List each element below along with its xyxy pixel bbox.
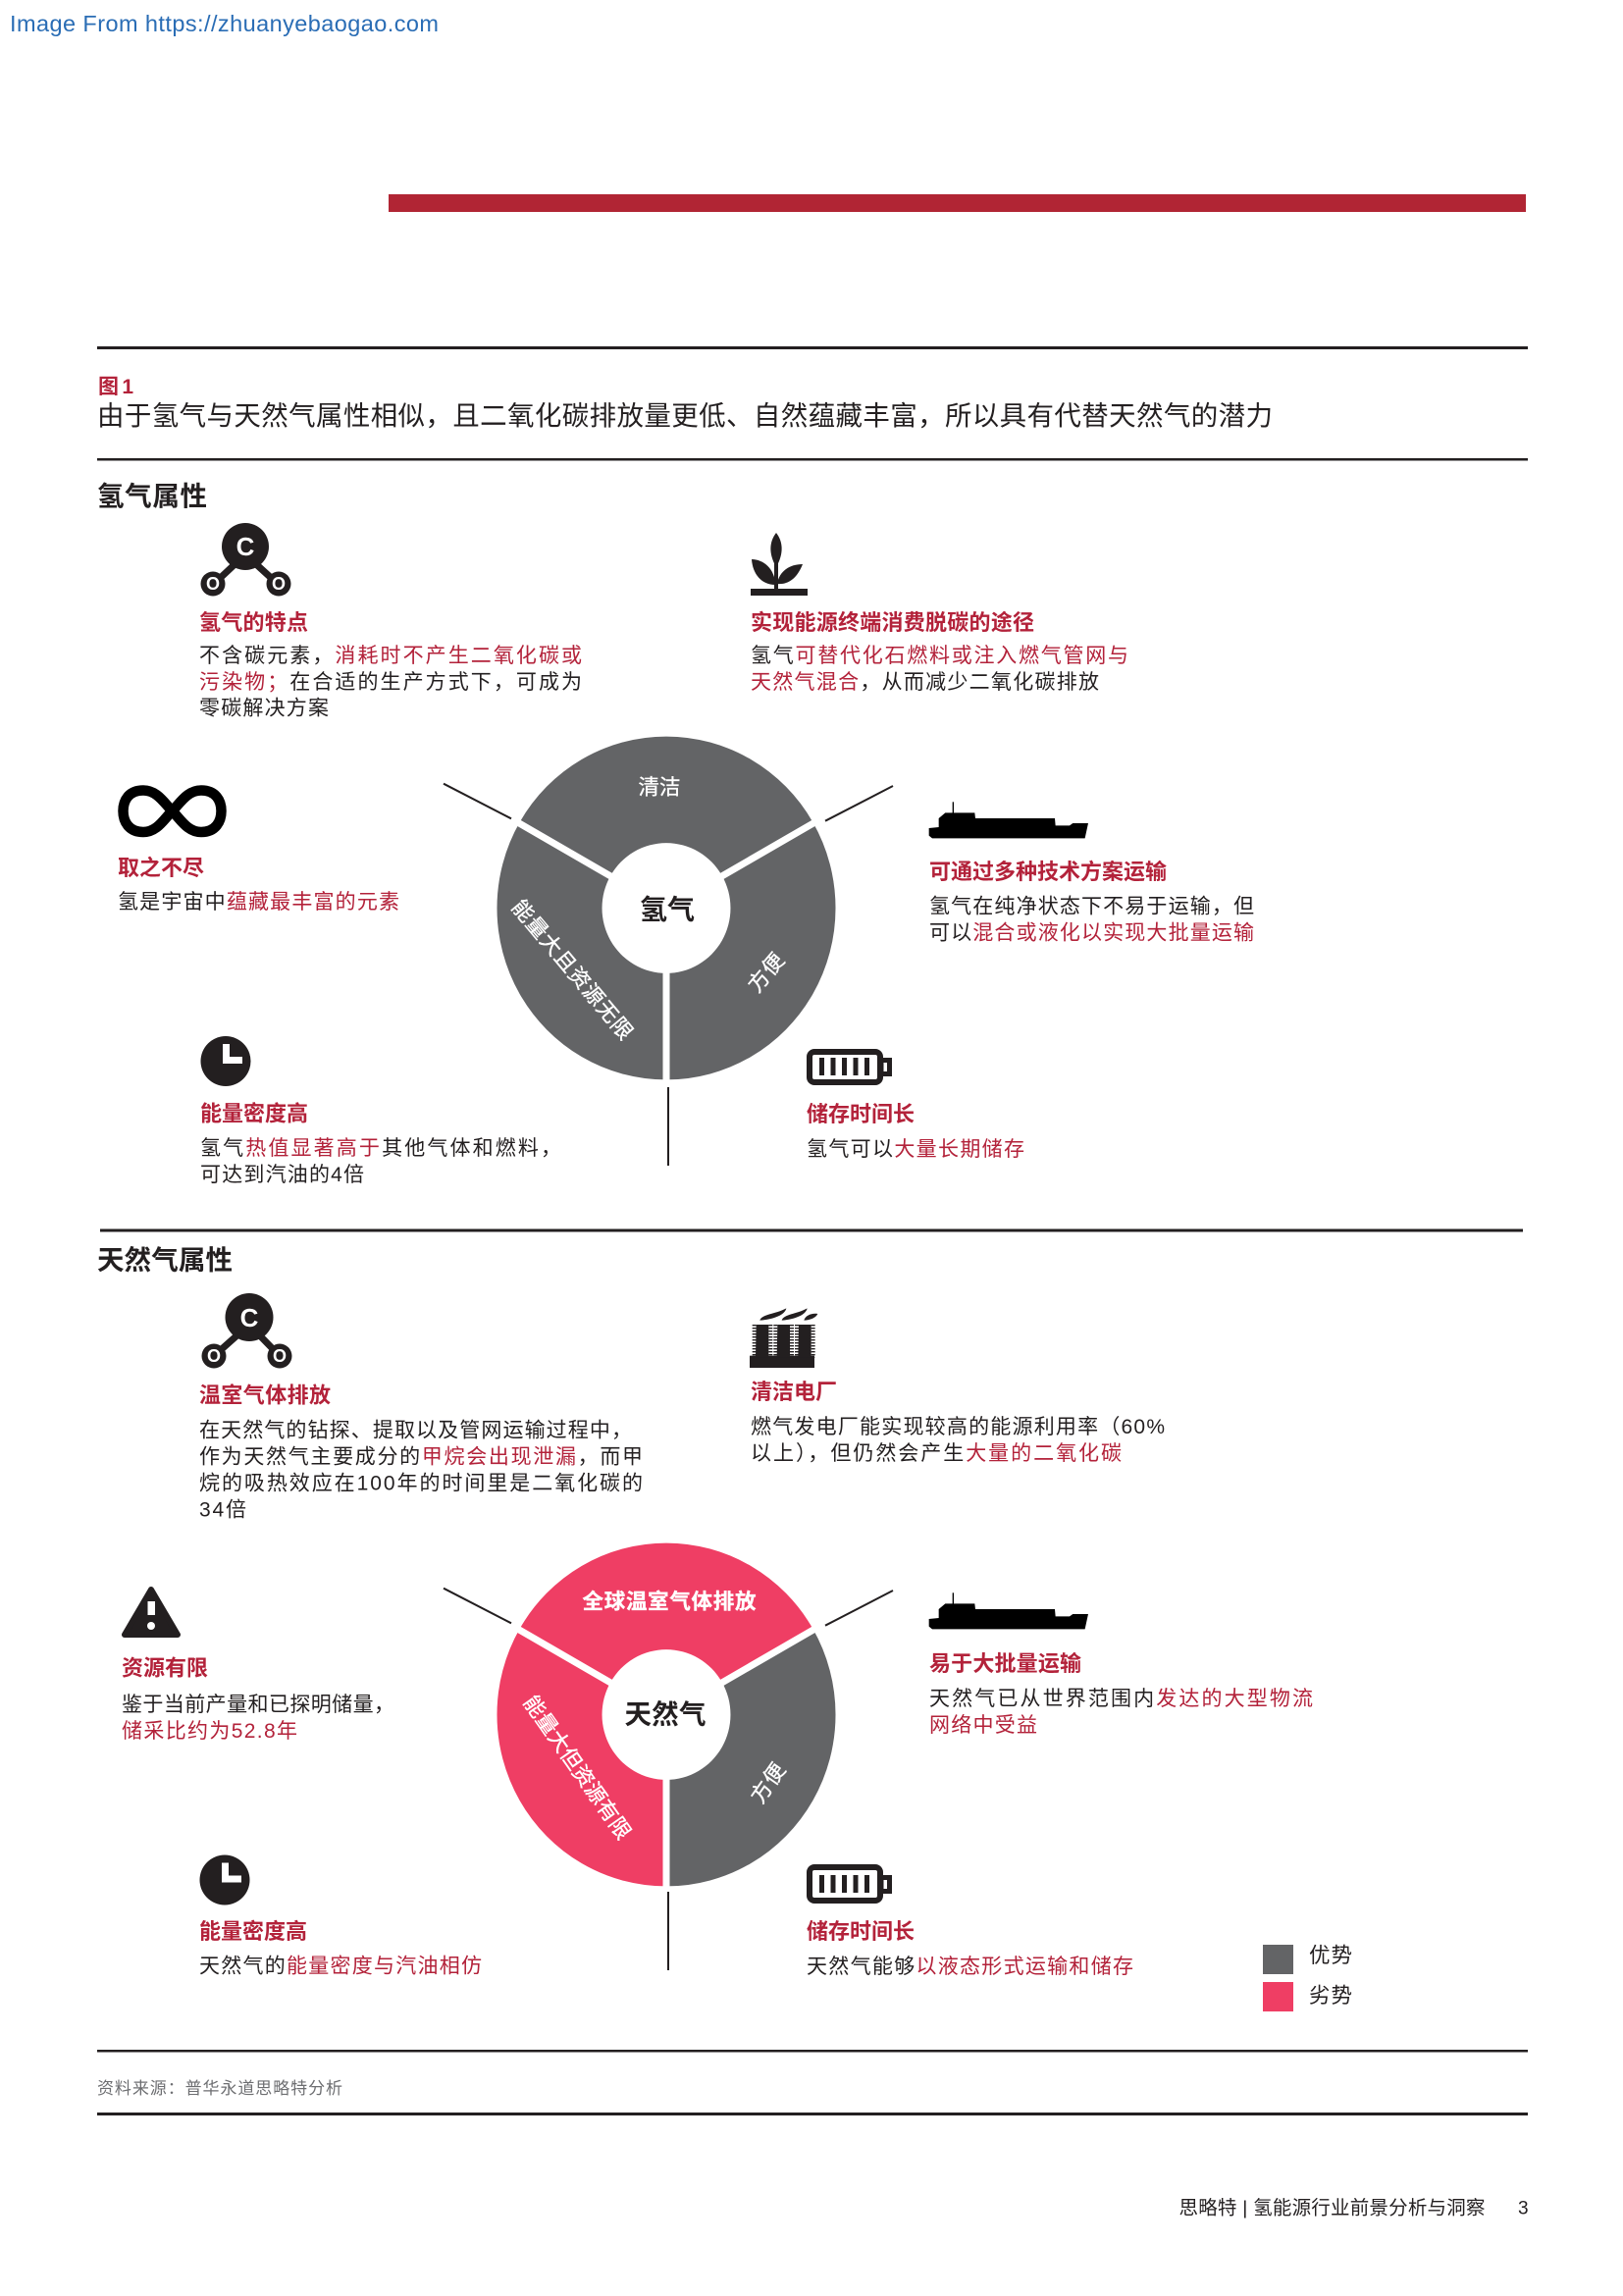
block: clean power plant — [750, 1308, 1165, 1465]
segment: global GHG emissions — [520, 1543, 812, 1682]
body text: 氢气可以大量长期储存 — [807, 1138, 1024, 1161]
heading: 可通过多种技术方案运输 — [929, 860, 1167, 884]
segment: convenient — [666, 822, 836, 1079]
leader lines: hydrogen pie — [444, 784, 893, 1166]
legend swatch: advantage — [1263, 1945, 1293, 1974]
heading: 储存时间长 — [807, 1919, 915, 1944]
body text: 鉴于当前产量和已探明储量， — [122, 1694, 394, 1716]
body text: 烷的吸热效应在100年的时间里是二氧化碳的 — [199, 1472, 643, 1495]
figure heading — [97, 376, 1273, 431]
heading: 能量密度高 — [199, 1919, 307, 1944]
body text: 污染物；在合适的生产方式下，可成为 — [199, 671, 582, 694]
body text: 可以混合或液化以实现大批量运输 — [929, 922, 1254, 944]
body text — [751, 1416, 1165, 1465]
body text — [751, 645, 1128, 694]
body text: 34倍 — [199, 1499, 246, 1521]
body text: 不含碳元素，消耗时不产生二氧化碳或 — [199, 645, 582, 667]
body text — [122, 1694, 394, 1743]
segment: clean — [520, 737, 812, 875]
label: energy large but limited: 能量大但资源有限 — [519, 1692, 635, 1844]
body text: 天然气的能量密度与汽油相仿 — [199, 1955, 482, 1978]
page number: 3 — [1518, 2198, 1529, 2219]
block: end-use decarbonisation — [751, 533, 1128, 694]
body text: 氢气热值显著高于其他气体和燃料， — [200, 1137, 561, 1160]
heading: 温室气体排放 — [199, 1383, 331, 1407]
icon: battery — [810, 1867, 892, 1901]
block: energy density — [199, 1854, 482, 1978]
body text: 天然气混合，从而减少二氧化碳排放 — [751, 671, 1099, 694]
icon: clock — [200, 1854, 249, 1905]
body text: 天然气能够以液态形式运输和储存 — [807, 1956, 1133, 1978]
legend label: disadvantage: 劣势 — [1309, 1984, 1352, 2008]
legend — [1263, 1944, 1352, 2011]
body text — [199, 645, 582, 720]
footer — [1179, 2198, 1529, 2219]
body text — [929, 895, 1254, 944]
label: clean: 清洁 — [638, 775, 681, 799]
section heading: natural gas: 天然气属性 — [97, 1244, 233, 1276]
body text: 在天然气的钻探、提取以及管网运输过程中， — [199, 1419, 632, 1442]
body text: 燃气发电厂能实现较高的能源利用率（60% — [751, 1416, 1165, 1438]
icon: warning triangle — [125, 1590, 178, 1635]
legend swatch: disadvantage — [1263, 1982, 1293, 2011]
icon: CO2 molecule — [202, 1293, 292, 1368]
heading: 易于大批量运输 — [929, 1651, 1081, 1676]
icon: CO2 molecule: O — [273, 1346, 287, 1366]
segment: convenient — [666, 1629, 836, 1886]
section heading: hydrogen: 氢气属性 — [97, 481, 207, 511]
block: long storage — [807, 1052, 1024, 1161]
heading: 储存时间长 — [807, 1102, 915, 1126]
icon: CO2 molecule: O — [207, 1346, 221, 1366]
icon: infinity — [124, 791, 222, 832]
leader lines: natural gas pie — [444, 1589, 893, 1970]
segment: high energy unlimited — [497, 822, 666, 1079]
heading: 资源有限 — [122, 1656, 208, 1680]
body text: 氢是宇宙中蕴藏最丰富的元素 — [118, 891, 399, 913]
body text — [929, 1688, 1313, 1737]
label: convenient: 方便 — [747, 1759, 790, 1807]
icon: CO2 molecule: C — [240, 1303, 259, 1332]
block: limited resources — [122, 1590, 394, 1743]
block: hydrogen characteristics — [199, 523, 582, 720]
pie: natural gas attributes — [497, 1543, 836, 1892]
label: convenient: 方便 — [744, 949, 789, 997]
body text: 以上），但仍然会产生大量的二氧化碳 — [751, 1442, 1122, 1465]
body text: 作为天然气主要成分的甲烷会出现泄漏，而甲 — [199, 1446, 643, 1468]
icon: CO2 molecule: C — [236, 532, 255, 561]
body text: 天然气已从世界范围内发达的大型物流 — [929, 1688, 1313, 1710]
segment: high energy but limited — [497, 1629, 666, 1886]
icon: factory — [750, 1308, 817, 1368]
body text — [199, 1419, 643, 1521]
source note: 资料来源：普华永道思略特分析 — [97, 2079, 342, 2098]
body text: 零碳解决方案 — [199, 697, 329, 720]
body text: 储采比约为52.8年 — [122, 1720, 297, 1743]
label: energy large and unlimited: 能量大且资源无限 — [507, 896, 637, 1044]
top red bar — [389, 194, 1526, 212]
icon: CO2 molecule — [200, 523, 290, 597]
footer title: 思略特 | 氢能源行业前景分析与洞察 — [1179, 2198, 1486, 2219]
icon: battery — [810, 1052, 892, 1082]
body text — [200, 1137, 561, 1186]
icon: ship — [929, 1592, 1088, 1629]
center label: 氢气 — [640, 895, 695, 924]
icon: clock — [200, 1036, 251, 1086]
body text: 氢气在纯净状态下不易于运输，但 — [929, 895, 1254, 918]
label: global GHG emissions: 全球温室气体排放 — [583, 1590, 757, 1613]
heading: 实现能源终端消费脱碳的途径 — [751, 610, 1034, 635]
center label: 天然气 — [624, 1699, 707, 1729]
block: easy bulk transport — [929, 1592, 1313, 1737]
block: long storage — [807, 1867, 1133, 1978]
figure title: 由于氢气与天然气属性相似，且二氧化碳排放量更低、自然蕴藏丰富，所以具有代替天然气的潜力 — [97, 400, 1273, 431]
block: inexhaustible — [118, 791, 399, 913]
block: greenhouse gas emissions — [199, 1293, 643, 1521]
block: transport — [929, 802, 1254, 944]
body text: 网络中受益 — [929, 1714, 1037, 1737]
heading: 能量密度高 — [200, 1101, 308, 1126]
body text: 氢气可替代化石燃料或注入燃气管网与 — [751, 645, 1128, 667]
icon: plant — [751, 533, 808, 596]
icon: CO2 molecule: O — [206, 574, 220, 594]
block: high energy density — [200, 1036, 561, 1186]
icon: CO2 molecule: O — [272, 574, 286, 594]
heading: 清洁电厂 — [751, 1380, 837, 1404]
legend label: advantage: 优势 — [1309, 1944, 1352, 1967]
body text: 可达到汽油的4倍 — [200, 1164, 364, 1186]
source watermark link: Image From https://zhuanyebaogao.com — [10, 11, 439, 36]
heading: 氢气的特点 — [199, 610, 308, 635]
pie: hydrogen attributes — [497, 737, 836, 1085]
icon: ship — [929, 802, 1088, 838]
figure number: 图1 — [98, 376, 133, 398]
heading: 取之不尽 — [118, 856, 204, 880]
